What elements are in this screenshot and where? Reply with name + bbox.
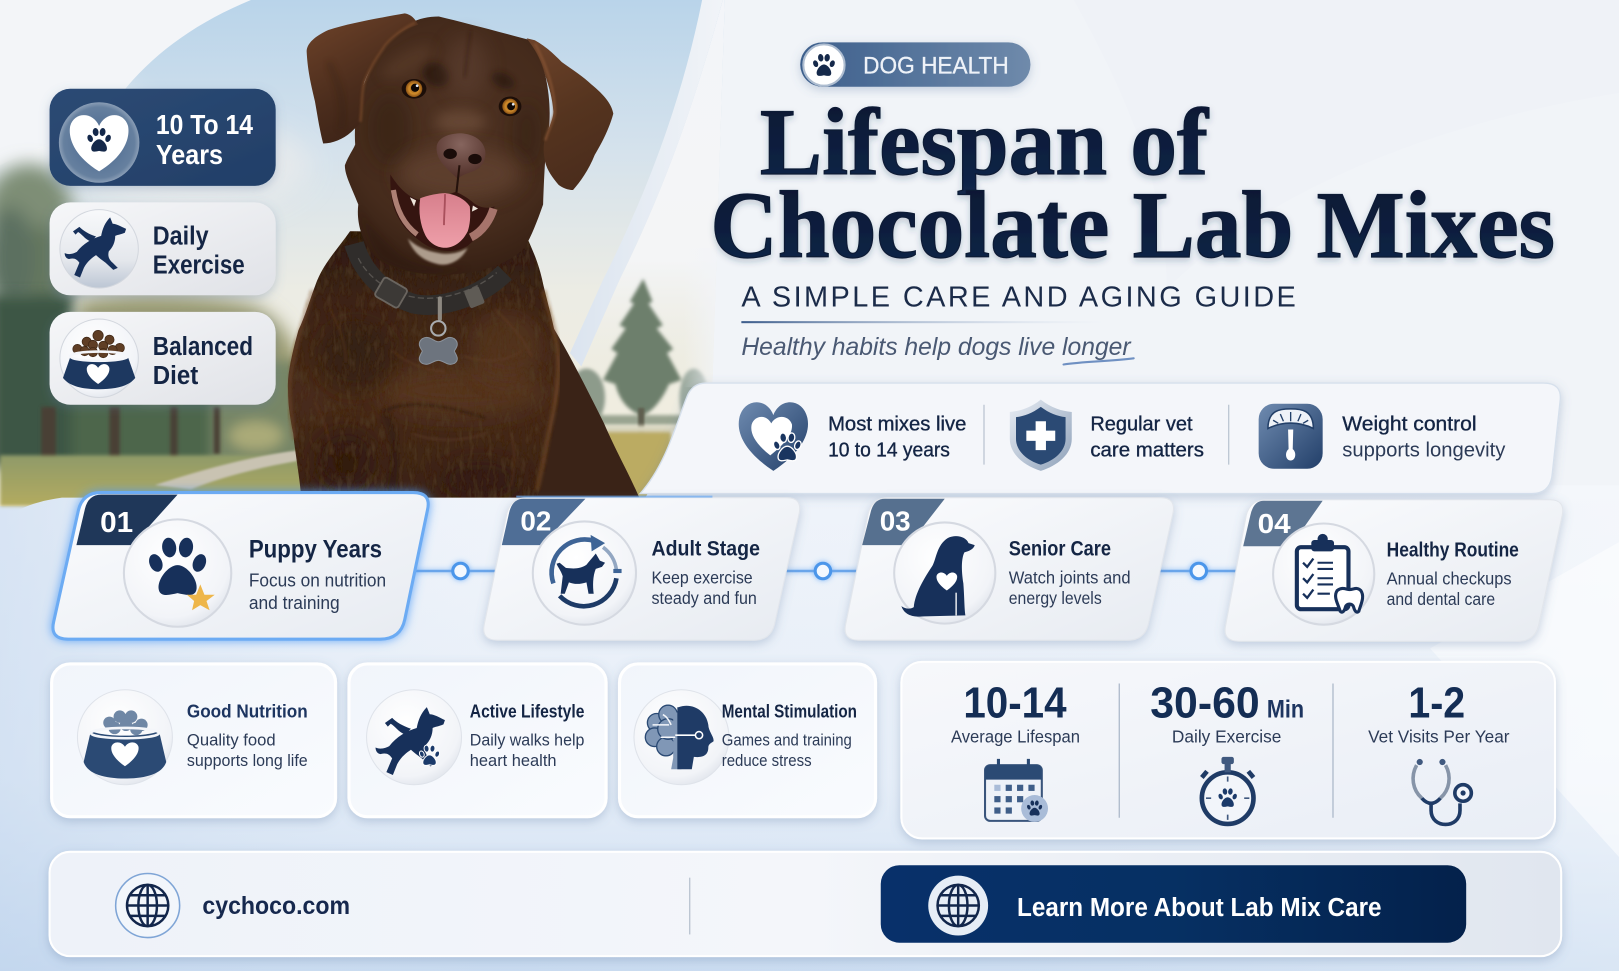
subtitle: A SIMPLE CARE AND AGING GUIDE	[741, 282, 1296, 314]
icon: clipboard with tooth	[1273, 523, 1374, 625]
panel: key facts: Most mixes live	[828, 413, 966, 436]
icon: website globe	[116, 874, 180, 938]
stage card 02: adult stage: 02	[520, 506, 551, 537]
benefit card: active lifestyle	[349, 664, 606, 817]
icon: paw with star	[124, 519, 231, 627]
benefit card: active lifestyle: Active Lifestyle	[470, 701, 584, 722]
stage card 04: healthy routine: and dental care	[1387, 589, 1495, 609]
stage card 03: senior care	[845, 498, 1173, 640]
dog head	[345, 17, 550, 275]
icon: stopwatch with paw	[1202, 757, 1253, 824]
icon: dog in cycle arrows	[533, 521, 636, 625]
icon: calendar with paw	[985, 759, 1048, 822]
icon: paw in circle	[803, 44, 845, 86]
stage card 04: healthy routine: 04	[1258, 508, 1291, 539]
stats panel: Daily Exercise	[1172, 726, 1281, 746]
main title: Lifespan of	[760, 89, 1209, 195]
left panel: daily exercise: Daily	[153, 223, 209, 251]
benefit card: active lifestyle: Daily walks help	[470, 730, 584, 749]
dog right ear	[527, 38, 613, 190]
distant trees on the right	[577, 278, 715, 497]
footer bar: cychoco.com	[202, 893, 350, 920]
stage card 03: senior care: energy levels	[1009, 588, 1102, 608]
dog body	[288, 231, 560, 500]
benefit card: mental stimulation: Mental Stimulation	[722, 701, 857, 722]
benefit card: good nutrition: Quality food	[187, 730, 276, 749]
title block badge: dog health: DOG HEALTH	[863, 53, 1009, 79]
panel: key facts: care matters	[1090, 438, 1204, 461]
left panel: daily exercise	[50, 202, 276, 295]
stage card 02: adult stage	[484, 497, 800, 640]
icon: leaping dog with paw	[367, 690, 462, 785]
dog haunch	[516, 329, 639, 498]
benefit card: good nutrition: supports long life	[187, 751, 308, 770]
left panel: balanced diet	[50, 312, 276, 405]
dog open mouth	[390, 174, 495, 265]
icon: heart with paw	[739, 402, 808, 471]
right white swoosh	[570, 0, 725, 366]
stats panel: 30-60	[1150, 680, 1260, 728]
benefit card: mental stimulation	[620, 664, 876, 817]
benefit card: mental stimulation: Games and training	[722, 730, 852, 749]
stats panel	[901, 662, 1555, 838]
stage card 04: healthy routine: Annual checkups	[1387, 568, 1512, 588]
stage card 01: puppy years: 01	[100, 507, 133, 539]
benefit card: good nutrition: Good Nutrition	[187, 701, 308, 722]
icon: vet shield	[1010, 400, 1072, 471]
icon: sitting senior dog	[894, 522, 995, 624]
dog nose	[437, 133, 485, 193]
icon: weight scale	[1259, 404, 1323, 469]
stage card 04: healthy routine	[1225, 500, 1563, 641]
stage card 02: adult stage: Adult Stage	[652, 536, 760, 561]
background park photo	[0, 0, 743, 506]
stage card 02: adult stage: Keep exercise	[652, 567, 753, 587]
stats panel: 1-2	[1408, 680, 1465, 728]
panel: key facts: 10 to 14 years	[828, 438, 950, 461]
stage card 03: senior care: Watch joints and	[1009, 567, 1131, 587]
dog left ear	[307, 13, 418, 144]
connector: stage 3 to 4	[1146, 563, 1239, 579]
tagline	[741, 321, 1134, 364]
main title: Chocolate Lab Mixes	[710, 172, 1555, 278]
icon: bowl with kibble	[77, 690, 172, 785]
left panel: daily exercise: Exercise	[153, 252, 245, 280]
stats panel: Average Lifespan	[951, 726, 1080, 746]
connector: stage 1 to 2	[408, 563, 496, 579]
panel: key facts: Regular vet	[1090, 413, 1193, 436]
icon: food bowl	[60, 319, 138, 398]
left panel: 10 to 14 years: Years	[156, 139, 223, 170]
tagline: Healthy habits help dogs live longer	[741, 334, 1132, 361]
benefit card: good nutrition	[52, 664, 336, 817]
stage card 01: puppy years: Focus on nutrition	[249, 569, 386, 590]
dog collar and tag	[354, 244, 505, 364]
stage card 02: adult stage: steady and fun	[652, 588, 757, 608]
grass and path	[0, 455, 310, 506]
benefit card: mental stimulation: reduce stress	[722, 751, 812, 770]
benefit card: active lifestyle: heart health	[470, 751, 557, 770]
footer bar	[50, 852, 1561, 956]
dog photo	[288, 13, 640, 500]
left panel: balanced diet: Balanced	[153, 333, 253, 361]
stage card 03: senior care: Senior Care	[1009, 536, 1111, 561]
stats panel: Vet Visits Per Year	[1368, 726, 1510, 746]
stage card 01: puppy years	[53, 493, 428, 639]
dog eyes	[402, 79, 521, 116]
icon: brain and head profile	[634, 690, 729, 785]
call to action button	[881, 865, 1466, 943]
left tree mass	[0, 164, 301, 398]
icon: running dog	[60, 210, 138, 288]
panel: key facts: supports longevity	[1342, 438, 1506, 461]
icon: stethoscope	[1413, 759, 1471, 824]
stage card 01: puppy years: Puppy Years	[249, 537, 382, 564]
stats panel: 10-14	[963, 680, 1067, 728]
icon: heart with paw	[59, 102, 139, 183]
stats panel: Min	[1267, 697, 1304, 724]
left panel: 10 to 14 years	[50, 89, 276, 186]
connector: stage 2 to 3	[774, 563, 862, 579]
panel: key facts	[640, 383, 1560, 494]
main title	[710, 89, 1555, 278]
title block badge: dog health	[800, 42, 1030, 87]
panel: key facts: Weight control	[1342, 413, 1477, 436]
stage card 04: healthy routine: Healthy Routine	[1387, 539, 1519, 562]
call to action button: Learn More About Lab Mix Care	[1017, 894, 1382, 922]
stage card 03: senior care: 03	[880, 506, 911, 537]
left panel: balanced diet: Diet	[153, 362, 199, 390]
left panel: 10 to 14 years: 10 To 14	[156, 109, 253, 140]
stage card 01: puppy years: and training	[249, 592, 340, 613]
